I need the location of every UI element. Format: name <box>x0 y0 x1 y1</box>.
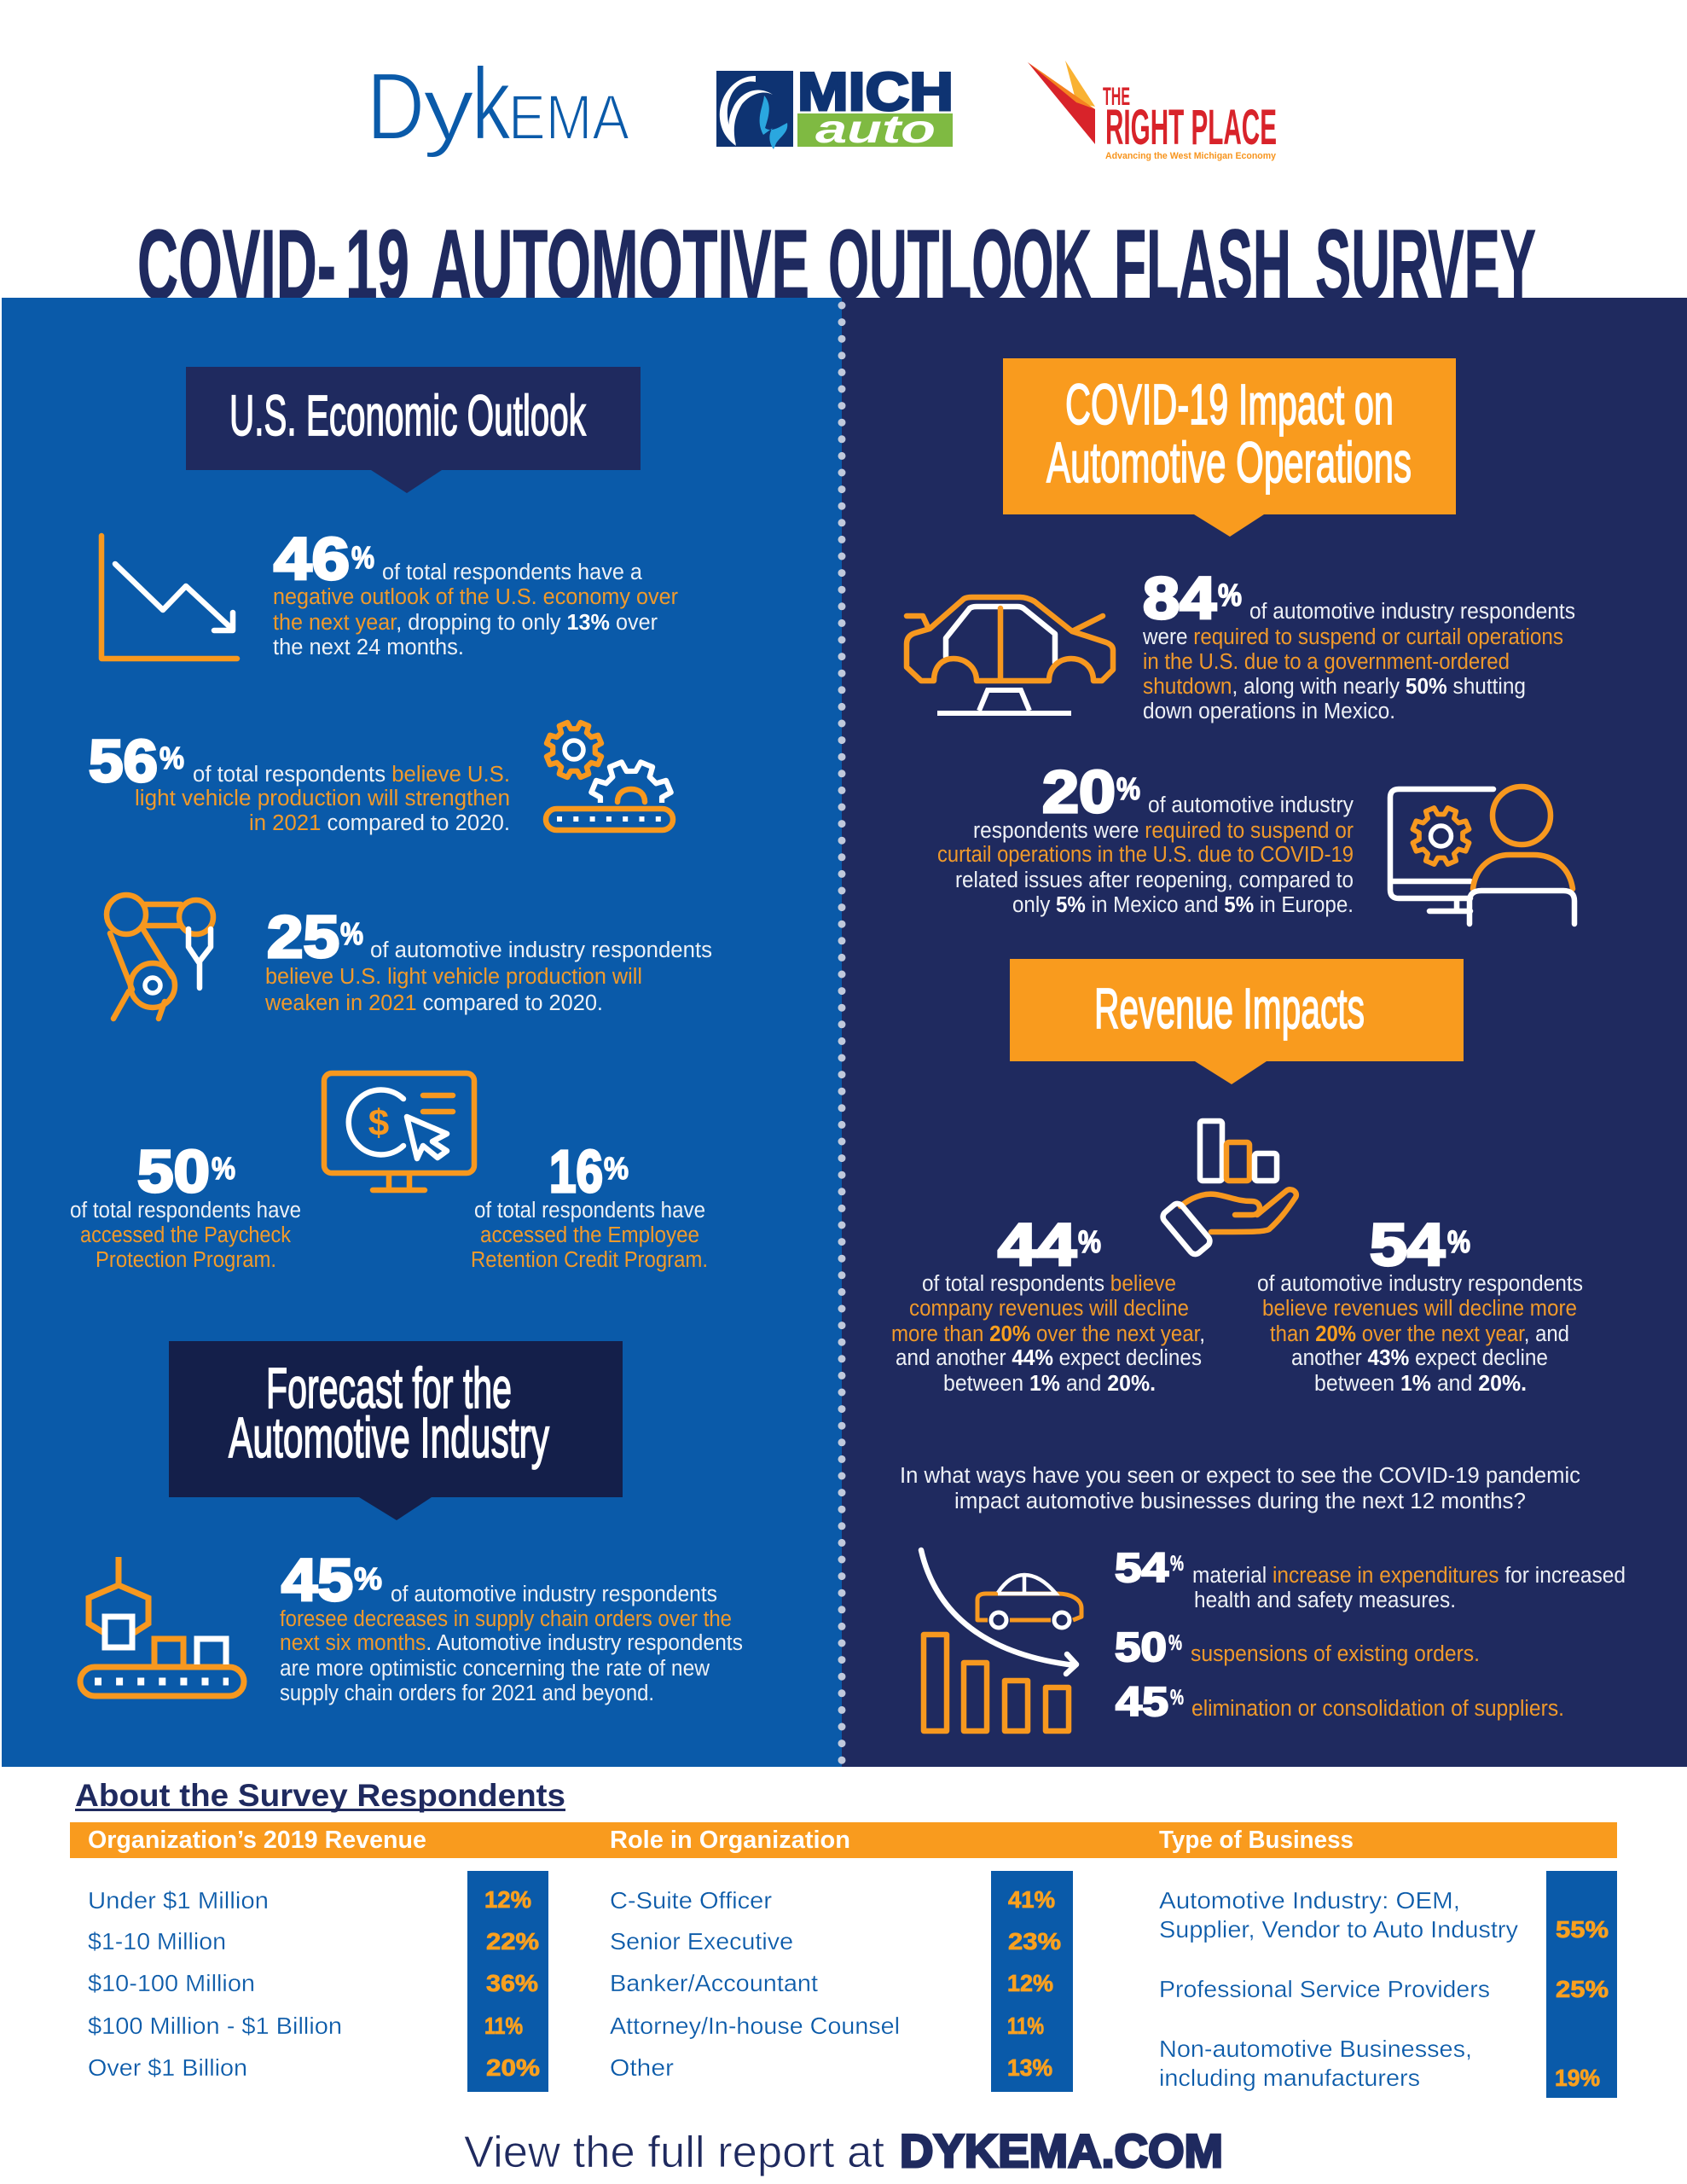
stat: 50 percent: Protection Program. <box>96 1248 276 1272</box>
stat: 20 percent: of automotive industry <box>1148 793 1354 817</box>
stat: 84 percent: 84 <box>1143 565 1216 631</box>
table: business type: Professional Service Providers <box>1159 1976 1490 2002</box>
stat: 54 percent expenditures: material increase in expenditures for increased <box>1192 1564 1626 1588</box>
stat: 56 percent: in 2021 compared to 2020. <box>249 811 510 835</box>
stat: 20 percent: 20 <box>1042 758 1116 825</box>
icon: monitor with dollar and cursor <box>324 1073 474 1190</box>
stat: 16 percent: of total respondents have <box>474 1199 705 1223</box>
stat: 45 percent suppliers: % <box>1170 1686 1184 1710</box>
table: role: 12% <box>1007 1970 1053 1996</box>
title: COVID- <box>137 209 336 320</box>
stat: 50 percent suspensions: 50 <box>1115 1625 1167 1670</box>
stat: 44 percent: and another 44% expect declines <box>896 1346 1202 1370</box>
stat: 46 percent: the next 24 months. <box>273 636 464 659</box>
heading: Revenue Impacts: Revenue Impacts <box>1094 977 1365 1041</box>
stat: 44 percent <box>891 1211 1205 1396</box>
icon: gears and conveyor <box>542 720 675 833</box>
text: survey question: In what ways have you seen or expect to see the COVID-19 pandemic <box>900 1464 1580 1488</box>
stat: 45 percent supply chain: next six months. Automotive industry respondents <box>280 1631 743 1655</box>
stat: 16 percent: 16 <box>549 1138 603 1205</box>
title: OUTLOOK <box>828 209 1092 320</box>
icon: robot arm <box>107 895 213 1019</box>
logo: The Right Place: THE <box>1103 83 1130 111</box>
stat: 54 percent revenues: than 20% over the next year, and <box>1270 1322 1569 1346</box>
table: revenue: 22% <box>486 1928 539 1955</box>
stat: 20 percent: % <box>1116 771 1140 806</box>
stat: 44 percent: more than 20% over the next year, <box>891 1322 1205 1346</box>
stat: 46 percent: 46 <box>274 526 350 592</box>
stat: 45 percent suppliers: 45 <box>1116 1680 1168 1725</box>
stat: 84 percent: % <box>1218 578 1242 613</box>
stat: 54 percent expenditures <box>1115 1546 1626 1612</box>
table: role: C-Suite Officer <box>610 1887 772 1914</box>
stat: 50 percent: 50 <box>137 1138 210 1205</box>
stat: 20 percent: related issues after reopening, compared to <box>955 868 1354 892</box>
table: business type: 25% <box>1556 1976 1609 2002</box>
stat: 46 percent: the next year, dropping to only 13% over <box>273 611 658 635</box>
footer call to action: View the full report at <box>464 2128 885 2177</box>
stat: 54 percent expenditures: health and safety measures. <box>1194 1589 1456 1612</box>
icon: hand holding bars <box>1161 1121 1296 1257</box>
stat: 16 percent: % <box>604 1151 629 1186</box>
panel: left background <box>2 298 842 1767</box>
stat: 50 percent: of total respondents have <box>70 1199 301 1223</box>
stat: 50 percent: % <box>212 1151 235 1186</box>
stat: 16 percent <box>471 1138 708 1272</box>
table: revenue: $1-10 Million <box>88 1928 226 1955</box>
logo: MichAuto: MICH <box>797 62 954 122</box>
table: business type: including manufacturers <box>1159 2065 1420 2091</box>
table: role: 23% <box>1008 1928 1061 1955</box>
table: revenue: 12% <box>484 1886 531 1913</box>
stat: 20 percent <box>937 758 1354 917</box>
stat: 84 percent: of automotive industry respondents <box>1249 600 1575 624</box>
stat: 54 percent revenues: of automotive industry respondents <box>1257 1272 1583 1296</box>
stat: 45 percent supply chain: foresee decreases in supply chain orders over the <box>280 1607 732 1631</box>
table: revenue: $100 Million - $1 Billion <box>88 2013 342 2039</box>
logo: Dykema: D <box>367 54 425 160</box>
table: business type <box>1159 1871 1617 2098</box>
text: survey question: impact automotive businesses during the next 12 months? <box>954 1490 1526 1513</box>
heading: Forecast for the Automotive Industry: Forecast for the <box>266 1356 512 1420</box>
stat: 44 percent: 44 <box>998 1211 1076 1278</box>
table: business type: Non-automotive Businesses, <box>1159 2036 1472 2062</box>
stat: 16 percent: Retention Credit Program. <box>471 1248 708 1272</box>
stat: 84 percent: were required to suspend or curtail operations <box>1142 625 1563 649</box>
title: AUTOMOTIVE <box>431 209 809 320</box>
stat: 54 percent expenditures: 54 <box>1115 1546 1168 1591</box>
stat: 25 percent: believe U.S. light vehicle production will <box>265 965 642 989</box>
heading: COVID-19 Impact on Automotive Operations: Automotive Operations <box>1046 431 1412 495</box>
heading: COVID-19 Impact on Automotive Operations <box>1003 358 1456 537</box>
heading: Forecast for the Automotive Industry <box>169 1341 623 1520</box>
heading: COVID-19 Impact on Automotive Operations: COVID-19 Impact on <box>1065 373 1394 437</box>
table: role: Attorney/In-house Counsel <box>610 2013 900 2039</box>
stat: 44 percent: of total respondents believe <box>922 1272 1176 1296</box>
logo: The Right Place <box>1028 61 1277 161</box>
stat: 50 percent suspensions: suspensions of existing orders. <box>1191 1642 1480 1666</box>
logo: The Right Place: Advancing the West Michigan Economy <box>1105 151 1277 161</box>
stat: 46 percent: % <box>351 540 374 575</box>
stat: 45 percent suppliers <box>1116 1680 1564 1725</box>
footer call to action <box>464 2124 1223 2177</box>
table: revenue: 36% <box>486 1970 538 1996</box>
heading: Revenue Impacts <box>1010 959 1464 1084</box>
logo: Dykema: k <box>472 47 512 161</box>
stat: 45 percent supply chain <box>280 1547 743 1705</box>
stat: 45 percent supply chain: 45 <box>281 1547 353 1613</box>
logo: The Right Place: RIGHT PLACE <box>1105 100 1277 155</box>
stat: 45 percent suppliers: elimination or consolidation of suppliers. <box>1191 1697 1564 1721</box>
icon: falling bars with car <box>921 1550 1081 1731</box>
stat: 46 percent <box>101 526 678 659</box>
stat: 46 percent: of total respondents have a <box>382 561 643 584</box>
stat: 56 percent: % <box>159 741 184 775</box>
heading: U.S. Economic Outlook <box>186 367 641 493</box>
logo: MichAuto: auto <box>815 107 936 151</box>
stat: 25 percent: % <box>340 916 363 951</box>
title: 19 <box>345 209 409 320</box>
heading: U.S. Economic Outlook: U.S. Economic Outlook <box>229 384 586 448</box>
table: role <box>610 1871 1073 2092</box>
icon: car frame on lift <box>907 597 1113 713</box>
table: role: 11% <box>1007 2013 1044 2039</box>
stat: 44 percent: % <box>1078 1224 1101 1259</box>
table: business type: 55% <box>1556 1916 1609 1943</box>
stat: 20 percent: only 5% in Mexico and 5% in Europe. <box>1012 893 1354 917</box>
stat: 54 percent revenues: between 1% and 20%. <box>1314 1372 1527 1396</box>
icon: claw and conveyor <box>80 1557 244 1696</box>
table: business type: 19% <box>1555 2065 1600 2091</box>
table: role: 41% <box>1008 1886 1055 1913</box>
icon: declining line chart <box>101 536 237 659</box>
logo: Dykema <box>367 47 630 161</box>
logo: Dykema: y <box>423 59 475 159</box>
stat: 45 percent supply chain: supply chain orders for 2021 and beyond. <box>280 1682 654 1705</box>
stat: 16 percent: accessed the Employee <box>480 1223 699 1247</box>
stat: 25 percent: weaken in 2021 compared to 2020. <box>264 991 603 1015</box>
stat: 50 percent suspensions <box>1115 1625 1480 1670</box>
stat: 56 percent: 56 <box>89 728 158 794</box>
stat: 44 percent: company revenues will decline <box>909 1297 1189 1321</box>
stat: 84 percent: down operations in Mexico. <box>1143 700 1395 723</box>
stat: 25 percent <box>264 903 712 1015</box>
title <box>137 209 1536 320</box>
logo: MichAuto <box>716 62 954 151</box>
title: FLASH <box>1114 209 1291 320</box>
heading: Forecast for the Automotive Industry: Automotive Industry <box>229 1406 549 1470</box>
stat: 54 percent revenues: 54 <box>1370 1211 1445 1278</box>
stat: 54 percent expenditures: % <box>1170 1552 1184 1576</box>
table: revenue: Under $1 Million <box>88 1887 269 1914</box>
table: role: Banker/Accountant <box>610 1970 818 1996</box>
stat: 45 percent supply chain: are more optimistic concerning the rate of new <box>280 1657 710 1681</box>
stat: 84 percent: in the U.S. due to a government-ordered <box>1143 650 1510 674</box>
stat: 25 percent: 25 <box>267 903 339 970</box>
stat: 84 percent: shutdown, along with nearly 50% shutting <box>1143 675 1526 699</box>
table: role: Senior Executive <box>610 1928 793 1955</box>
stat: 20 percent: respondents were required to suspend or <box>973 819 1354 843</box>
table: revenue: 20% <box>486 2054 540 2081</box>
icon: monitor with gear and person <box>1390 787 1574 924</box>
stat: 56 percent <box>89 728 510 835</box>
stat: 54 percent revenues: believe revenues will decline more <box>1262 1297 1577 1321</box>
table: revenue: Over $1 Billion <box>88 2054 247 2081</box>
stat: 56 percent: light vehicle production will strengthen <box>135 787 510 810</box>
table: revenue: $10-100 Million <box>88 1970 255 1996</box>
table header bar: Organization’s 2019 Revenue <box>88 1827 426 1854</box>
stat: 84 percent <box>1142 565 1575 723</box>
table: business type: Automotive Industry: OEM, <box>1159 1887 1460 1914</box>
stat: 56 percent: of total respondents believe U.S. <box>193 763 510 787</box>
stat: 50 percent: accessed the Paycheck <box>80 1223 291 1247</box>
table header bar <box>70 1822 1617 1858</box>
heading: About the Survey Respondents: About the Survey Respondents <box>75 1778 565 1813</box>
table: revenue: 11% <box>484 2013 523 2039</box>
stat: 54 percent revenues: % <box>1447 1224 1470 1259</box>
panel: right background <box>842 298 1687 1767</box>
stat: 45 percent supply chain: of automotive industry respondents <box>391 1583 717 1606</box>
stat: 46 percent: negative outlook of the U.S. economy over <box>273 585 678 609</box>
stat: 25 percent: of automotive industry respondents <box>370 938 712 962</box>
table: business type: Supplier, Vendor to Auto Industry <box>1159 1916 1518 1943</box>
table: role: Other <box>610 2054 674 2081</box>
stat: 20 percent: curtail operations in the U.S. due to COVID-19 <box>937 843 1354 867</box>
stat: 54 percent revenues: another 43% expect decline <box>1291 1346 1548 1370</box>
stat: 50 percent suspensions: % <box>1168 1631 1182 1655</box>
table: revenue <box>88 1871 548 2092</box>
icon: monitor with dollar and cursor: $ <box>368 1102 389 1144</box>
logo: Dykema: EMA <box>508 82 630 153</box>
table header bar: Role in Organization <box>610 1827 850 1854</box>
footer call to action: DYKEMA.COM <box>900 2124 1223 2177</box>
stat: 50 percent <box>70 1138 301 1272</box>
text: survey question <box>900 1464 1580 1513</box>
stat: 44 percent: between 1% and 20%. <box>943 1372 1156 1396</box>
table header bar: Type of Business <box>1159 1827 1354 1854</box>
stat: 45 percent supply chain: % <box>354 1561 382 1596</box>
stat: 54 percent revenues <box>1257 1211 1583 1396</box>
table: role: 13% <box>1007 2054 1052 2081</box>
